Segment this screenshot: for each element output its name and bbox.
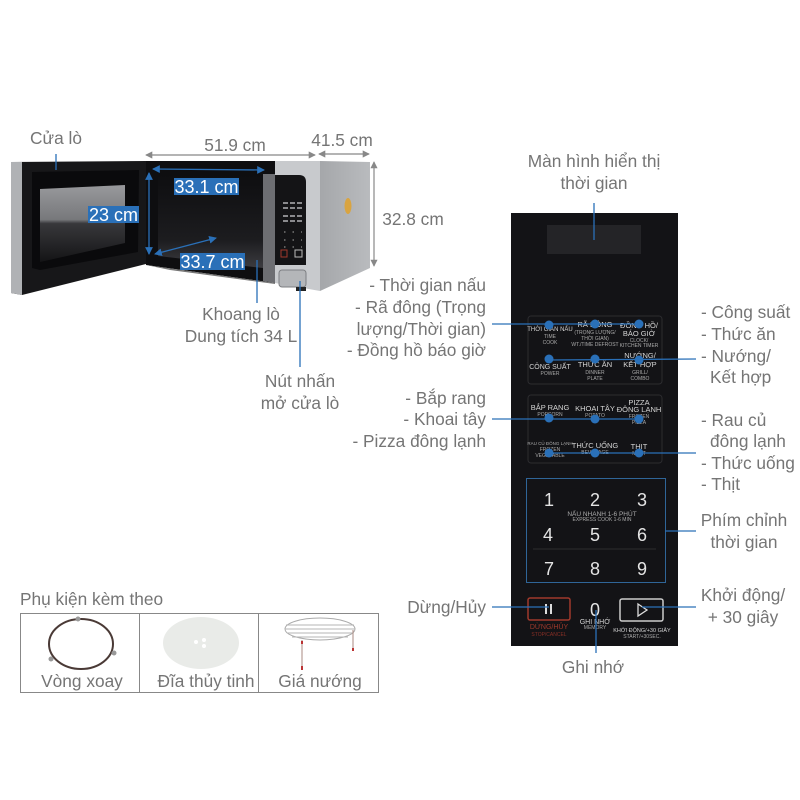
callout: number keys	[665, 510, 787, 552]
number pad: 8	[590, 559, 600, 579]
function key group 1: BÁO GIỜ	[623, 329, 656, 338]
function key group 1: COOK	[543, 340, 558, 346]
callout: vegetables/beverage/meat: - Thịt	[701, 474, 740, 494]
callout: vegetables/beverage/meat: đông lạnh	[710, 431, 786, 451]
function key group 2: BẮP RANG	[531, 403, 569, 412]
function key group 1: TIME	[544, 334, 557, 340]
callout: memory	[562, 610, 624, 677]
function key group 1: NƯỚNG/	[624, 351, 657, 360]
function key group 1: RÃ ĐÔNG	[577, 320, 613, 329]
function key group 1: ĐỒNG HỒ/	[620, 320, 659, 330]
callout: cook/defrost/clock: - Đồng hồ báo giờ	[347, 340, 486, 360]
callout: cook/defrost/clock: - Rã đông (Trọng	[355, 297, 486, 317]
callout: popcorn/potato/pizza: - Bắp rang	[405, 388, 486, 408]
callout: power/dinner/grill: Kết hợp	[710, 367, 771, 387]
function key group 1: COMBO	[631, 376, 650, 382]
function key group 1: GRILL/	[632, 370, 649, 376]
control panel heading: Màn hình hiển thị	[528, 151, 660, 171]
dimension: depth: 41.5 cm	[311, 130, 373, 150]
callout: memory: Ghi nhớ	[562, 657, 624, 677]
callout: cook/defrost/clock	[347, 275, 644, 360]
function key group 1: CÔNG SUẤT	[529, 361, 572, 371]
memory button: GHI NHỚ	[580, 617, 610, 626]
accessories heading: Phụ kiện kèm theo	[20, 589, 163, 609]
callout: popcorn/potato/pizza: - Khoai tây	[403, 409, 486, 429]
accessories table	[20, 613, 378, 693]
dimension: height	[374, 162, 444, 266]
number pad: EXPRESS COOK 1-6 MIN	[573, 517, 632, 523]
function key group 1: WT./TIME DEFROST	[571, 342, 619, 348]
label: cavity capacity: Khoang lò	[202, 304, 280, 324]
label: cavity capacity	[185, 260, 298, 346]
callout: number keys: thời gian	[710, 532, 778, 552]
callout: popcorn/potato/pizza	[352, 388, 644, 451]
cavity depth badge: 33.7 cm	[180, 252, 245, 272]
function key group 2: PIZZA	[628, 398, 650, 407]
number pad: 9	[637, 559, 647, 579]
function key group 1: (TRỌNG LƯỢNG/	[574, 330, 616, 336]
callout: power/dinner/grill: - Công suất	[701, 302, 791, 322]
stop button: STOP/CANCEL	[531, 632, 567, 638]
label: door button	[261, 281, 339, 413]
display	[547, 225, 641, 254]
number pad: 5	[590, 525, 600, 545]
label: door	[30, 128, 82, 170]
callout: cook/defrost/clock: lượng/Thời gian)	[357, 319, 486, 339]
function key group 2: POTATO	[585, 413, 605, 419]
accessory: rotating ring: Vòng xoay	[41, 671, 123, 691]
callout: power/dinner/grill: - Nướng/	[701, 346, 771, 366]
number pad	[526, 478, 666, 582]
control panel	[511, 213, 678, 646]
function key group 2: THỨC UỐNG	[572, 440, 618, 450]
number pad: 6	[637, 525, 647, 545]
start button: KHỞI ĐỘNG/+30 GIÂY	[613, 627, 671, 634]
memory button: 0	[590, 600, 600, 620]
start button: START/+30SEC.	[623, 634, 661, 640]
function key group 2: PIZZA	[632, 420, 647, 426]
callout: cook/defrost/clock: - Thời gian nấu	[369, 275, 486, 295]
function key group 1: POWER	[541, 371, 560, 377]
number pad: NẤU NHANH 1-6 PHÚT	[567, 508, 637, 518]
microwave photo	[11, 161, 370, 295]
callout: vegetables/beverage/meat: - Rau củ	[701, 410, 766, 430]
callout: display	[593, 203, 595, 240]
label: door: Cửa lò	[30, 128, 82, 148]
function key group 2: FROZEN	[540, 447, 561, 453]
function key group 2: RAU CỦ ĐÔNG LẠNH	[527, 440, 573, 446]
stop button: DỪNG/HỦY	[530, 622, 568, 631]
callout: start: + 30 giây	[708, 607, 779, 627]
callout: power/dinner/grill: - Thức ăn	[701, 324, 776, 344]
function key group 1: KITCHEN TIMER	[620, 343, 659, 349]
callout: popcorn/potato/pizza: - Pizza đông lạnh	[352, 431, 486, 451]
function key group 1: THỨC ĂN	[578, 360, 612, 369]
accessory: glass plate	[157, 617, 255, 691]
number pad: 4	[543, 525, 553, 545]
accessory: grill rack: Giá nướng	[278, 671, 362, 691]
function key group 2: POPCORN	[537, 412, 563, 418]
function key group 1: THỜI GIAN)	[581, 335, 609, 342]
callout: vegetables/beverage/meat: - Thức uống	[701, 453, 795, 473]
memory button: MEMORY	[584, 625, 607, 631]
callout: number keys: Phím chỉnh	[701, 510, 787, 530]
number pad: 7	[544, 559, 554, 579]
label: door button: Nút nhấn	[265, 371, 335, 391]
accessory: grill rack	[278, 618, 362, 691]
function key group 2: ĐÔNG LẠNH	[617, 405, 661, 414]
control panel heading: thời gian	[560, 173, 628, 193]
function key group 1: DINNER	[585, 370, 605, 376]
callout: start: Khởi động/	[701, 585, 785, 605]
function key group 1	[527, 316, 662, 384]
function key group 1: THỜI GIAN NẤU	[527, 326, 573, 333]
cavity height badge: 23 cm	[89, 205, 138, 225]
function key group 1: KẾT HỢP	[623, 359, 657, 369]
callout: power/dinner/grill	[544, 302, 791, 387]
function key group 2: MEAT	[632, 451, 646, 457]
label: cavity capacity: Dung tích 34 L	[185, 326, 298, 346]
function key group 2: THỊT	[631, 442, 648, 451]
accessory: rotating ring	[41, 616, 123, 691]
label: door button: mở cửa lò	[261, 393, 339, 413]
function key group 2: BEVERAGE	[581, 450, 609, 456]
start button	[613, 599, 671, 640]
number pad: 3	[637, 490, 647, 510]
number pad: 2	[590, 490, 600, 510]
number pad: 1	[544, 490, 554, 510]
dimension: height: 32.8 cm	[382, 209, 444, 229]
function key group 2: FROZEN	[629, 414, 650, 420]
control panel heading	[528, 151, 660, 193]
function key group 2	[527, 395, 662, 463]
function key group 2: VEGETABLE	[535, 453, 565, 459]
accessory: glass plate: Đĩa thủy tinh	[157, 671, 255, 691]
function key group 1: PLATE	[587, 376, 603, 382]
stop button	[528, 598, 570, 638]
cavity dimension arrows	[149, 169, 264, 254]
callout: vegetables/beverage/meat	[544, 410, 795, 494]
dimension: width: 51.9 cm	[204, 135, 266, 155]
function key group 2: KHOAI TÂY	[575, 404, 615, 413]
callout: stop: Dừng/Hủy	[407, 597, 486, 617]
callout: start	[642, 585, 785, 627]
cavity width badge: 33.1 cm	[174, 177, 239, 197]
memory button	[580, 600, 610, 631]
function key group 1: CLOCK/	[630, 338, 649, 344]
